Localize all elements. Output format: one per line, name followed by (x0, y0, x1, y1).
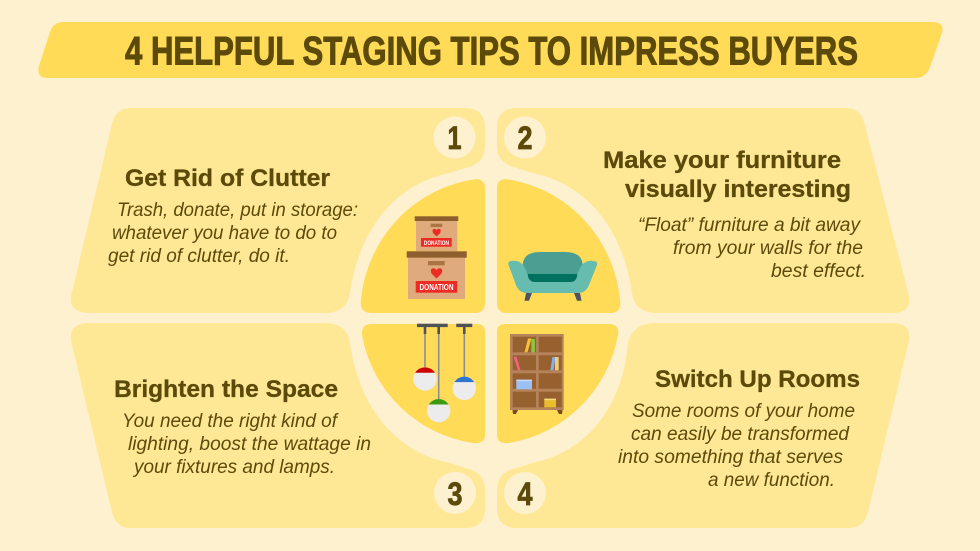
heading: tip 2: Make your furniture (603, 147, 841, 174)
text: tip 1 (108, 200, 358, 267)
text: tip 3: your fixtures and lamps. (132, 457, 335, 478)
text: tip 2: “Float” furniture a bit away (638, 215, 862, 236)
text: tip 2: from your walls for the (673, 238, 863, 259)
text: tip 3: You need the right kind of (122, 411, 339, 432)
text: tip 1: whatever you have to do to (112, 223, 337, 244)
heading: tip 1: Get Rid of Clutter (125, 165, 330, 192)
quarter panel: bottom left (362, 324, 485, 443)
heading: tip 2: visually interesting (625, 176, 851, 203)
text: tip 2 (638, 215, 866, 282)
text: tip 4: can easily be transformed (631, 424, 850, 445)
panel: tip 1 (71, 108, 485, 313)
text: tip 4 (618, 401, 855, 491)
icon: donation boxes (407, 216, 467, 299)
heading: tip 2 (603, 147, 851, 203)
text: tip 4: Some rooms of your home (632, 401, 855, 422)
number badge 2: 2 (518, 120, 532, 156)
panel: tip 3 (71, 323, 485, 528)
text: tip 3 (122, 411, 371, 478)
panel: tip 2 (497, 108, 909, 313)
icon: pendant lamps (413, 324, 476, 422)
number badge 4 (504, 472, 546, 514)
number badge 1: 1 (448, 120, 462, 156)
quarter panel: top left (361, 179, 485, 313)
text: tip 4: a new function. (708, 470, 835, 491)
panel: tip 4 (497, 323, 909, 528)
number badge 1 (434, 116, 476, 158)
number badge 2 (504, 116, 546, 158)
icon: bookshelf (510, 334, 564, 414)
number badge 3: 3 (448, 476, 462, 512)
quarter panel: top right (497, 179, 620, 313)
title banner (38, 22, 943, 78)
text: tip 1: Trash, donate, put in storage: (117, 200, 358, 221)
text: tip 1: get rid of clutter, do it. (108, 246, 290, 267)
icon: donation boxes: DONATION (424, 240, 449, 247)
text: tip 2: best effect. (771, 261, 866, 282)
quarter panel: bottom right (497, 324, 618, 443)
text: tip 3: lighting, boost the wattage in (128, 434, 371, 455)
heading: tip 3: Brighten the Space (114, 376, 338, 403)
number badge 3 (434, 472, 476, 514)
icon: donation boxes: DONATION (420, 282, 454, 292)
heading: tip 4: Switch Up Rooms (655, 366, 860, 393)
icon: sofa (508, 252, 597, 301)
number badge 4: 4 (518, 476, 533, 512)
text: tip 4: into something that serves (618, 447, 843, 468)
